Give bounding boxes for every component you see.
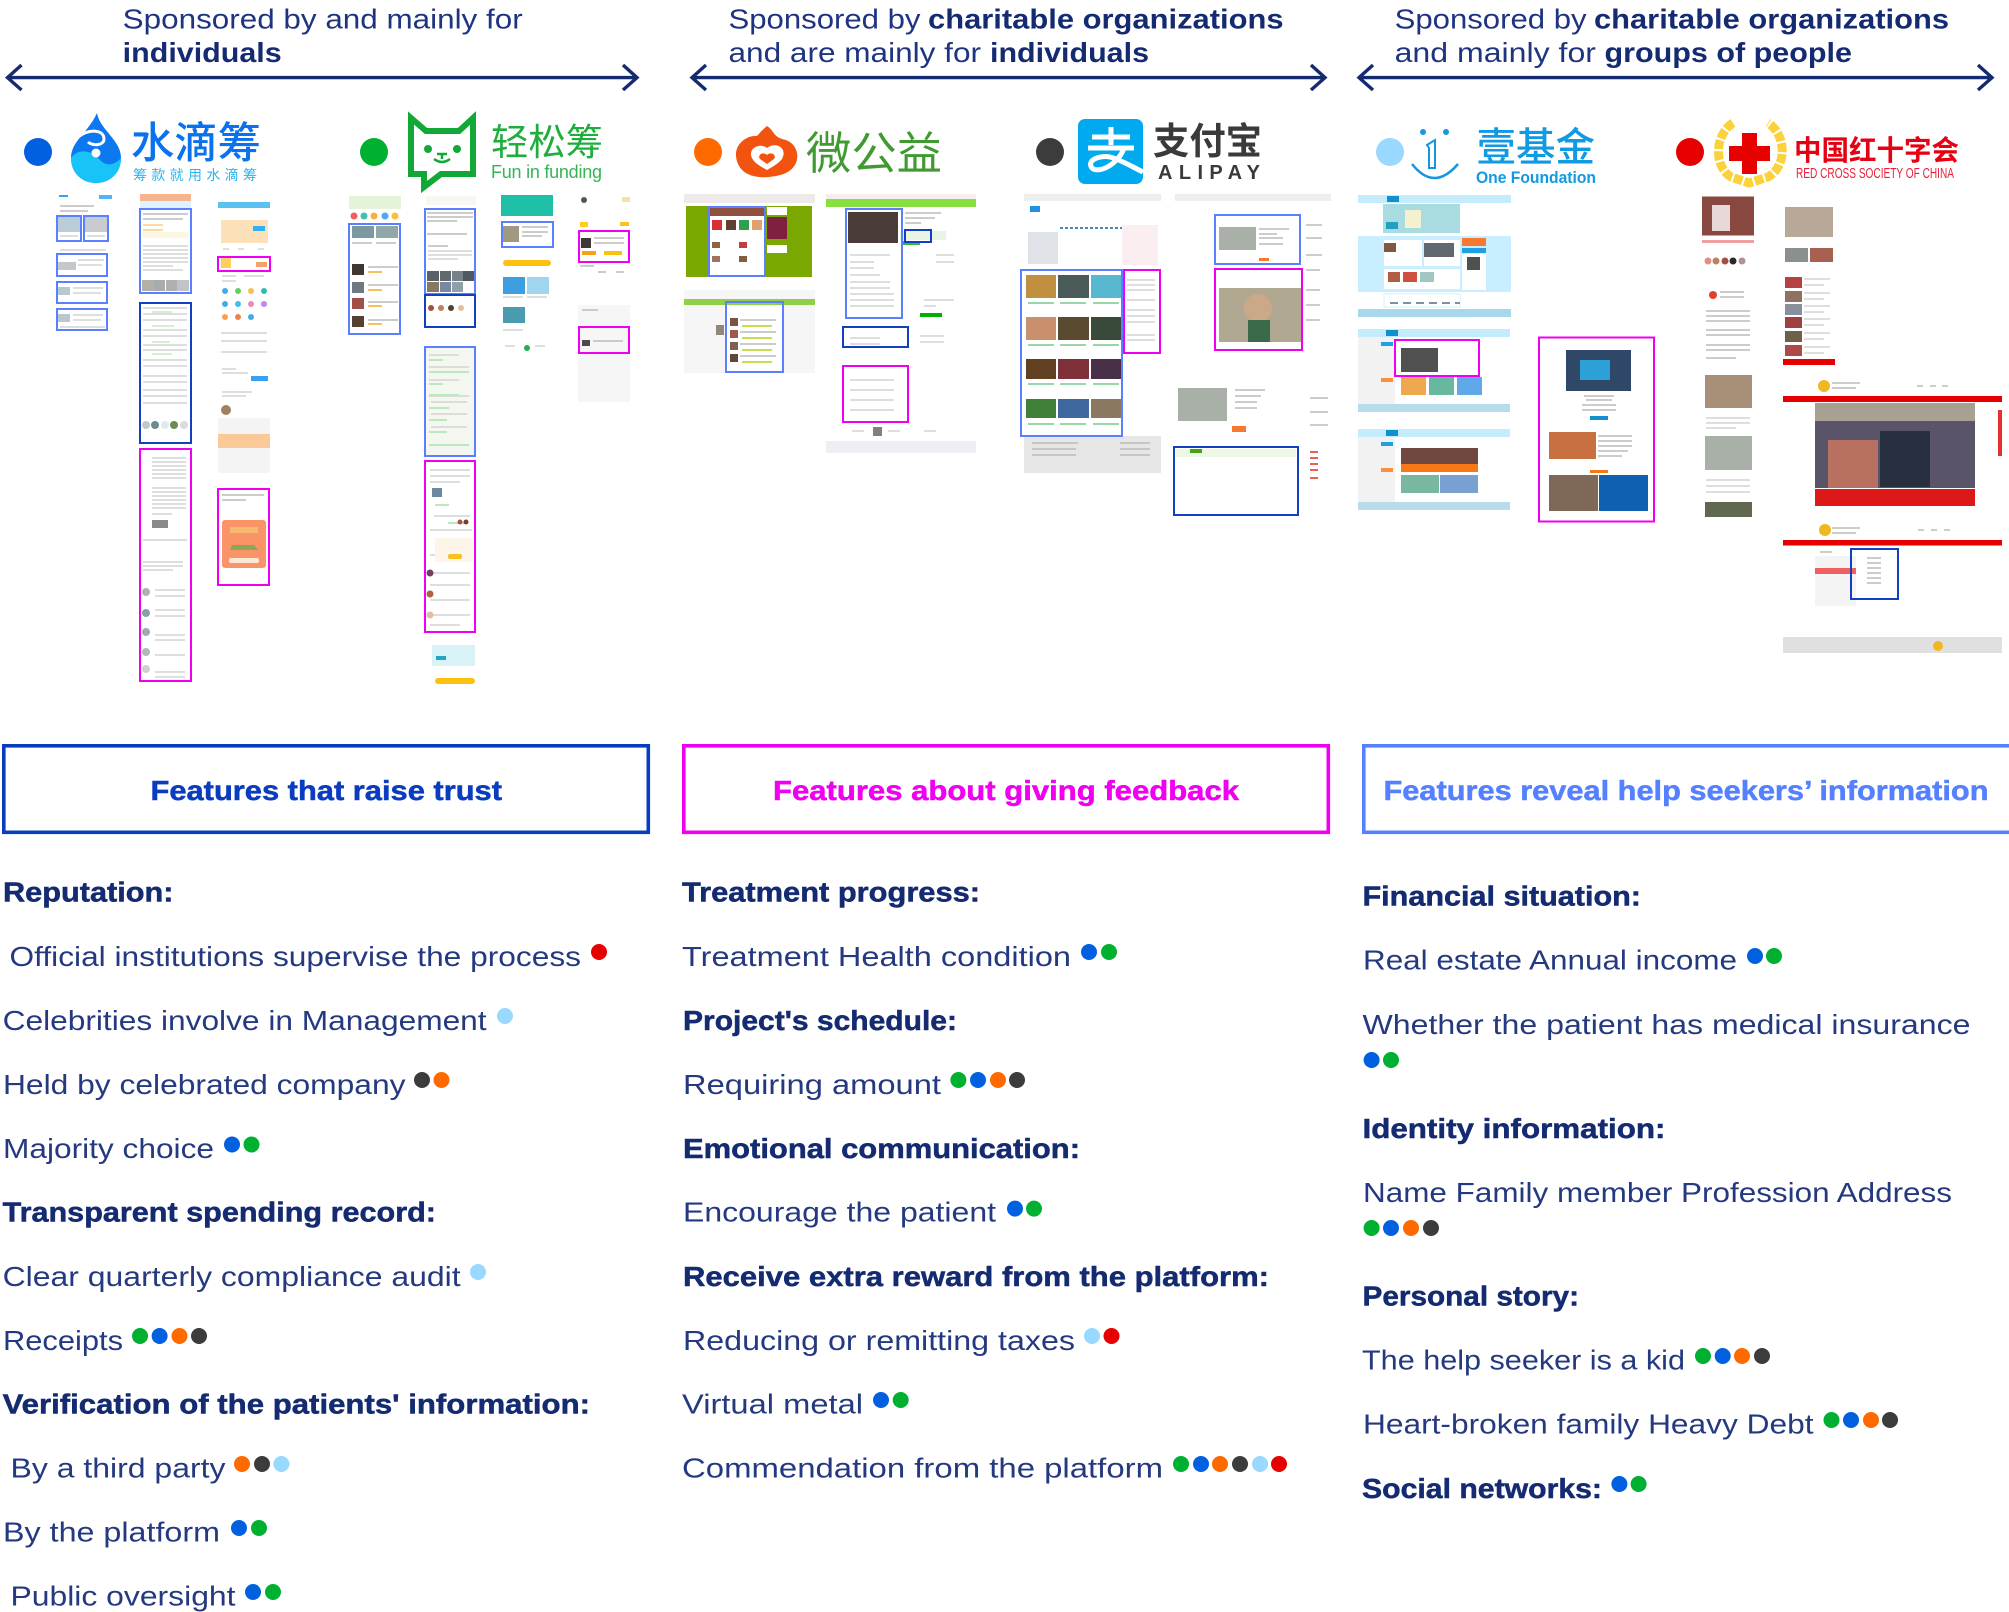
logo: Qingsongchou: 轻松筹 [491, 112, 603, 166]
heading: charity for groups: charitable organizations [1594, 4, 1949, 34]
feature: requiring amount [683, 1069, 1025, 1100]
screenshot: Weigongyi home [684, 194, 815, 277]
logo: Red Cross Society of China [1718, 123, 1959, 183]
screenshot: Red Cross home [1783, 380, 2002, 506]
panel: features that raise trust [3, 746, 648, 1612]
screenshot: Red Cross mobile list [1783, 207, 1835, 365]
heading: charity for groups: Sponsored by [1395, 4, 1587, 34]
screenshot: Qingsongchou profile [578, 197, 630, 402]
logo: Red Cross Society of China: 中国红十字会 [1794, 129, 1959, 169]
subheading: extra reward: Receive extra reward from the platform: [683, 1261, 1269, 1292]
heading: charity for groups: and mainly for [1395, 37, 1596, 68]
feature: name family profession address [1363, 1177, 1952, 1236]
heading: charity for individuals: charitable organizations [928, 4, 1284, 34]
panel: features about giving feedback [682, 746, 1328, 1484]
panel: features reveal help seekers' information [1362, 746, 2009, 1504]
feature: commendation [682, 1453, 1287, 1484]
feature: real estate: Real estate Annual income [1363, 945, 1737, 976]
feature: receipts: Receipts [3, 1325, 123, 1356]
panel: platforms sponsored by and for individuals [8, 4, 637, 684]
screenshot: Shuidichou detail [140, 194, 191, 681]
logo: One Foundation [1412, 115, 1596, 187]
logo: Shuidichou: 水滴筹 [131, 109, 261, 171]
feature: medical insurance [1362, 1009, 1970, 1068]
screenshot: One Foundation home [1358, 195, 1511, 317]
heading: individuals sponsor: individuals [123, 37, 282, 68]
panel: platforms sponsored by charity for individuals [684, 4, 1331, 515]
logo: Weigongyi [736, 117, 942, 182]
screenshot: One Foundation info [1358, 429, 1510, 510]
arrow: span of third group [1359, 65, 1992, 90]
heading: charity for individuals [728, 4, 1284, 68]
legend dot: Weigongyi [694, 138, 722, 166]
screenshot: Qingsongchou list [349, 196, 401, 334]
screenshot: Alipay list [1021, 194, 1161, 473]
feature: medical insurance: Whether the patient has medical insurance [1362, 1009, 1970, 1040]
heading: charity for individuals: individuals [990, 37, 1149, 68]
screenshot: Weigongyi list [684, 290, 815, 373]
feature: requiring amount: Requiring amount [683, 1069, 941, 1100]
heading box: help seekers: Features reveal help seekers’ information [1384, 775, 1988, 806]
screenshot: One Foundation project [1358, 329, 1510, 412]
feature: public oversight: Public oversight [10, 1581, 236, 1612]
logo: One Foundation: 壹基金 [1476, 115, 1595, 173]
logo: Weigongyi: 微公益 [806, 117, 942, 182]
feature: name family profession address: Name Family member Profession Address [1363, 1177, 1952, 1208]
logo: Shuidichou [71, 109, 261, 185]
feature: heart-broken family: Heart-broken family Heavy Debt [1363, 1409, 1814, 1440]
subheading: treatment progress: Treatment progress: [682, 877, 980, 908]
subheading: personal story: Personal story: [1362, 1280, 1579, 1312]
screenshot: Qingsongchou detail [425, 196, 476, 684]
screenshot: Red Cross info page [1783, 524, 2002, 653]
legend dot: Shuidichou [24, 138, 52, 166]
feature: commendation: Commendation from the platform [682, 1453, 1163, 1484]
feature: third party [10, 1453, 289, 1484]
logo: Alipay [1078, 111, 1262, 184]
subheading: verification: Verification of the patients' information: [3, 1388, 590, 1420]
screenshot: Qingsongchou topics [501, 195, 553, 351]
legend dot: Qingsongchou [360, 138, 388, 166]
subheading: schedule: Project's schedule: [683, 1005, 957, 1036]
subheading with dots: social networks: Social networks: [1362, 1473, 1602, 1504]
logo: Alipay: ALIPAY [1158, 162, 1261, 184]
heading: charity for groups [1395, 4, 1949, 68]
feature: kid: The help seeker is a kid [1362, 1345, 1685, 1376]
legend dot: Alipay [1036, 138, 1064, 166]
feature: majority choice: Majority choice [3, 1133, 214, 1164]
subheading: Reputation: Reputation: [3, 877, 173, 908]
feature: health condition: Treatment Health condition [682, 941, 1071, 972]
screenshot: Shuidichou list [57, 195, 112, 330]
feature: virtual metal [682, 1388, 909, 1420]
feature: celebrated company: Held by celebrated company [3, 1069, 406, 1100]
heading: charity for individuals: and are mainly for [728, 37, 981, 68]
heading: charity for individuals: Sponsored by [728, 4, 920, 34]
screenshot: One Foundation activity [1539, 338, 1654, 522]
logo: One Foundation: One Foundation [1476, 168, 1596, 187]
logo: Qingsongchou: Fun in funding [491, 162, 602, 182]
screenshot: Alipay detail [1174, 194, 1331, 515]
feature: receipts [3, 1325, 207, 1356]
feature: celebrities: Celebrities involve in Management [3, 1005, 487, 1036]
arrow: span of second group [692, 65, 1325, 90]
screenshot: Shuidichou home and pay [218, 202, 270, 585]
feature: encourage: Encourage the patient [683, 1197, 996, 1228]
heading box: feedback [684, 746, 1328, 832]
logo: Alipay: 支付宝 [1153, 111, 1262, 165]
subheading: emotional communication: Emotional communication: [683, 1133, 1080, 1164]
panel: platforms sponsored by charity for groups [1358, 4, 2002, 653]
screenshot: Weigongyi detail [826, 194, 976, 453]
heading: individuals sponsor [123, 4, 523, 68]
logo: Shuidichou: 筹款就用水滴筹 [133, 165, 257, 185]
subheading: spending record: Transparent spending record: [3, 1197, 436, 1228]
subheading: financial situation: Financial situation: [1362, 881, 1641, 912]
heading: charity for groups: groups of people [1604, 37, 1852, 68]
heading box: feedback: Features about giving feedback [773, 775, 1239, 806]
heading box: help seekers [1364, 746, 2009, 832]
heading: individuals sponsor: Sponsored by and mainly for [123, 4, 523, 34]
subheading: identity: Identity information: [1362, 1113, 1666, 1144]
logo: Qingsongchou [411, 112, 603, 187]
screenshot: Red Cross mobile article [1702, 196, 1754, 517]
legend dot: Red Cross [1676, 138, 1704, 166]
arrow: span of first group [8, 65, 637, 90]
heading box: trust: Features that raise trust [150, 775, 502, 806]
feature: audit: Clear quarterly compliance audit [3, 1261, 461, 1292]
feature: official supervision: Official institutions supervise the process [10, 941, 581, 972]
heading box: trust [4, 746, 648, 832]
feature: virtual metal: Virtual metal [682, 1388, 863, 1420]
feature: taxes: Reducing or remitting taxes [683, 1325, 1075, 1356]
feature: third party: By a third party [10, 1453, 226, 1484]
feature: by the platform: By the platform [3, 1517, 220, 1548]
legend dot: One Foundation [1376, 138, 1404, 166]
